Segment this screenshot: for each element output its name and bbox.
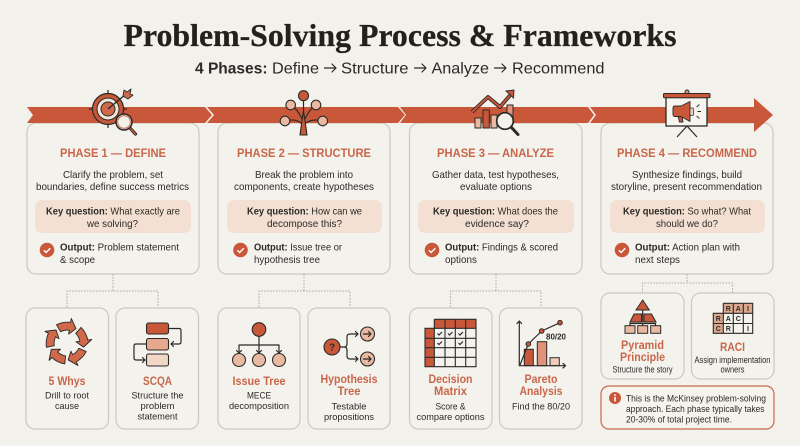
RACI description: owners (720, 364, 745, 374)
subtitle: Structure (341, 60, 409, 78)
Issue Tree description: decomposition (229, 400, 289, 411)
phase 1 output: & scope (60, 255, 95, 266)
SCQA description: statement (138, 410, 178, 422)
phase 4 description: Synthesize findings, build (632, 170, 742, 181)
icon: RACI grid: A (726, 316, 731, 323)
SCQA label: SCQA (143, 375, 173, 388)
connector: phase 1 to tools (67, 274, 158, 307)
phase 3 key question: evidence say? (465, 219, 529, 230)
panel: Pareto Analysis (500, 308, 582, 429)
icon: RACI grid: A (736, 306, 741, 313)
phase 4 output: next steps (635, 255, 680, 266)
icon: branching tree (280, 91, 328, 135)
phase 2 output: Output: Issue tree or (254, 242, 343, 253)
Pyramid Principle label (620, 339, 666, 364)
subtitle: Recommend (512, 60, 604, 78)
phase 3 description: evaluate options (460, 182, 532, 193)
Hypothesis Tree label: Hypothesis (320, 373, 378, 386)
SCQA description (132, 390, 184, 422)
Decision Matrix description: Score & (436, 400, 466, 412)
icon: RACI grid (713, 303, 753, 333)
icon: Pareto chart: 80/20 (546, 332, 567, 342)
Hypothesis Tree label: Tree (338, 385, 361, 398)
5 Whys description: cause (55, 400, 79, 411)
Issue Tree description (229, 390, 289, 411)
phase 4 key question: should we do? (656, 219, 718, 230)
connector: phase 4 to tools (642, 274, 732, 293)
panel: Hypothesis Tree (308, 308, 390, 429)
icon: cycle of five arrows (40, 318, 93, 369)
Decision Matrix label: Matrix (434, 385, 468, 398)
phase 3 description: Gather data, test hypotheses, (432, 170, 559, 181)
phase 1 key question: we solving? (86, 219, 138, 230)
icon: RACI grid: I (747, 306, 749, 313)
phase 1 key question (35, 200, 191, 233)
phase 1 description: boundaries, define success metrics (36, 182, 189, 193)
Decision Matrix label (428, 373, 472, 398)
phase 1 output: Output: Problem statement (60, 242, 179, 253)
icon: growth chart with magnifier (472, 90, 518, 134)
phase 3 heading: PHASE 3 — ANALYZE (437, 146, 554, 160)
icon: target with magnifier (89, 89, 136, 134)
phase 3 description (432, 170, 559, 193)
SCQA description: Structure the (132, 390, 184, 400)
callout text: This is the McKinsey problem-solving (626, 394, 766, 404)
panel: Decision Matrix (410, 308, 492, 429)
phase 2 heading: PHASE 2 — STRUCTURE (237, 146, 371, 160)
Pareto Analysis label: Analysis (520, 385, 562, 398)
icon: info (609, 392, 621, 404)
phase 3 key question (418, 200, 574, 233)
panel: phase 1 define (27, 123, 199, 274)
phase 4 output (615, 242, 740, 266)
Hypothesis Tree description: propositions (324, 411, 374, 422)
phase 4 description: storyline, present recommendation (611, 182, 762, 193)
phase 1 key question: Key question: What exactly are (46, 207, 180, 218)
callout text: 20-30% of total project time. (626, 414, 732, 425)
subtitle (195, 60, 604, 78)
phase 1 description (36, 170, 189, 193)
icon: RACI grid: C (716, 326, 721, 333)
phase 4 key question (610, 200, 765, 233)
phase 2 description (234, 170, 374, 193)
5 Whys label: 5 Whys (48, 375, 86, 388)
Decision Matrix description: compare options (416, 411, 485, 422)
phase 2 key question: decompose this? (267, 219, 342, 230)
Issue Tree label: Issue Tree (232, 375, 286, 388)
phase 3 output: options (445, 255, 477, 266)
icon: decision matrix grid (425, 319, 476, 367)
phase 3 output (425, 242, 558, 266)
icon: presentation board with megaphone (664, 90, 710, 137)
subtitle: 4 Phases: (195, 60, 268, 78)
Pyramid Principle label: Principle (620, 351, 666, 364)
icon: RACI grid: C (736, 316, 741, 323)
icon: issue tree (232, 323, 286, 366)
phase 2 description: Break the problem into (255, 170, 353, 181)
panel: phase 3 analyze (410, 123, 582, 274)
Pyramid Principle label: Pyramid (621, 339, 664, 352)
Decision Matrix description (416, 400, 485, 422)
Hypothesis Tree description: Testable (332, 400, 366, 412)
subtitle: Analyze (432, 60, 489, 78)
phase 1 output (40, 242, 179, 266)
panel: phase 2 structure (218, 123, 390, 274)
Decision Matrix label: Decision (428, 373, 472, 386)
RACI description (694, 355, 771, 374)
phase 2 key question (227, 200, 382, 233)
phase 2 output (233, 242, 343, 266)
5 Whys description: Drill to root (45, 390, 89, 400)
panel: phase 4 recommend (601, 123, 773, 274)
panel: Pyramid Principle (601, 293, 684, 379)
connector: phase 2 to tools (259, 274, 350, 307)
callout text (626, 394, 766, 425)
phase 3 key question: Key question: What does the (433, 207, 558, 218)
callout: McKinsey note (601, 386, 774, 429)
Hypothesis Tree description (324, 400, 374, 422)
icon: RACI grid: R (716, 316, 721, 323)
SCQA description: problem (140, 400, 175, 411)
icon: RACI grid: R (726, 306, 731, 313)
Pyramid Principle description: Structure the story (612, 364, 673, 374)
title: Problem-Solving Process & Frameworks (124, 18, 676, 53)
panel: Issue Tree (218, 308, 300, 429)
process arrow band (27, 98, 773, 132)
phase 2 output: hypothesis tree (254, 255, 320, 266)
panel: SCQA (116, 308, 198, 429)
icon: SCQA stacked flow (134, 323, 181, 366)
phase 4 key question: Key question: So what? What (623, 207, 751, 218)
phase 1 heading: PHASE 1 — DEFINE (60, 146, 166, 160)
connector: phase 3 to tools (450, 274, 541, 307)
5 Whys description (45, 390, 89, 411)
Hypothesis Tree label (320, 373, 378, 398)
Pareto Analysis description: Find the 80/20 (512, 400, 570, 412)
icon: RACI grid: I (747, 326, 749, 333)
icon: pyramid hierarchy (625, 300, 661, 333)
phase 1 description: Clarify the problem, set (63, 170, 163, 181)
panel: 5 Whys (26, 308, 108, 429)
Pareto Analysis label (520, 373, 562, 398)
phase 2 key question: Key question: How can we (247, 207, 362, 218)
icon: hypothesis tree: ? (329, 342, 335, 354)
icon: RACI grid: R (726, 326, 731, 333)
phase 4 heading: PHASE 4 — RECOMMEND (617, 146, 757, 160)
phase 4 output: Output: Action plan with (635, 242, 740, 253)
callout text: approach. Each phase typically takes (626, 404, 765, 415)
phase 2 description: components, create hypotheses (234, 182, 374, 193)
Issue Tree description: MECE (247, 390, 271, 400)
phase 3 output: Output: Findings & scored (445, 242, 558, 253)
RACI label: RACI (720, 341, 745, 354)
phase 4 description (611, 170, 762, 193)
Pareto Analysis label: Pareto (524, 373, 558, 386)
panel: RACI (692, 293, 774, 379)
RACI description: Assign implementation (694, 355, 771, 365)
subtitle: Define (272, 60, 319, 78)
